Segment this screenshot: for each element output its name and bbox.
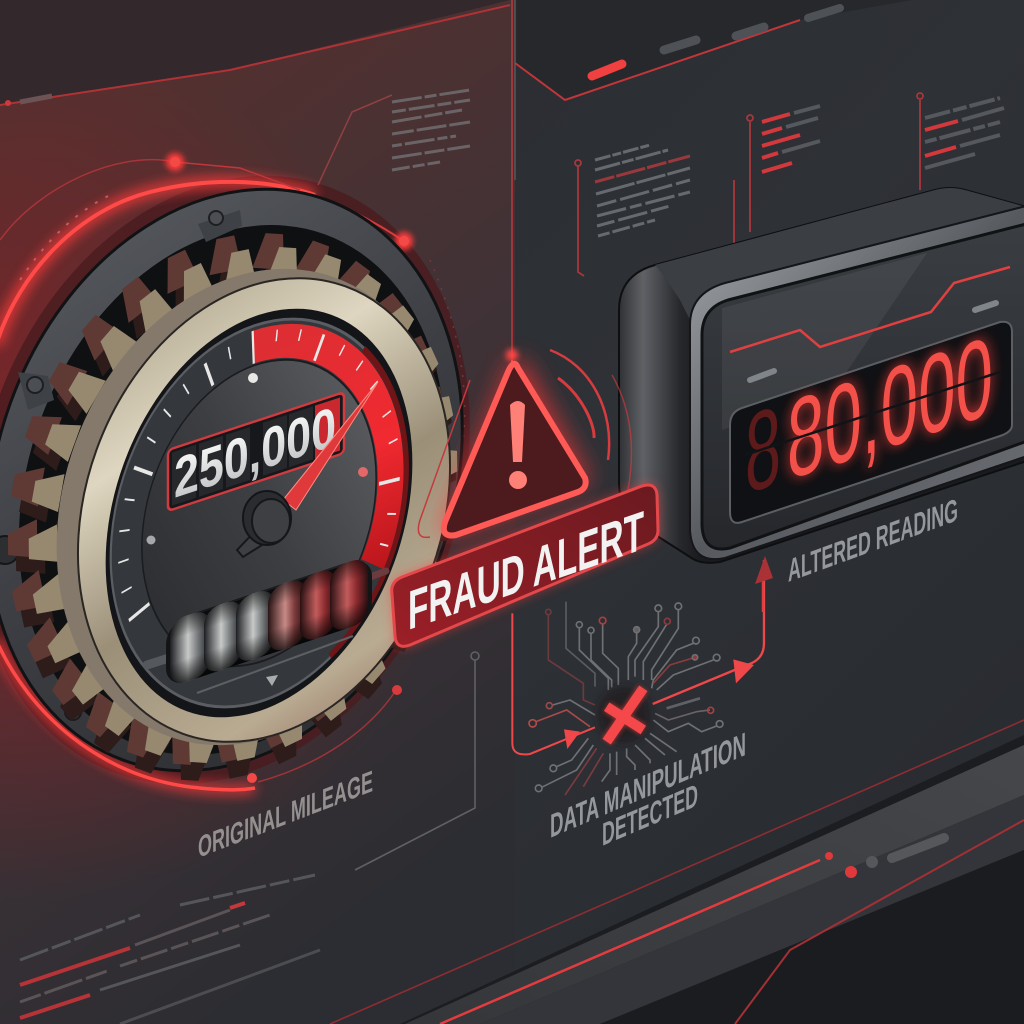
arrow up to device	[755, 556, 773, 612]
thin leader line: below badge	[355, 652, 479, 870]
top header lines and pills	[0, 0, 840, 180]
screen status line	[730, 267, 1010, 352]
input arrow	[512, 613, 595, 754]
badge text: FRAUD ALERT	[408, 499, 644, 642]
rollers mechanism	[147, 554, 386, 693]
bottom diagonal band	[330, 720, 1024, 1024]
gear teeth	[0, 171, 528, 843]
device bezel	[690, 205, 1024, 559]
digital display device	[619, 188, 1024, 563]
data manipulation circuit	[512, 560, 764, 795]
data manipulation label: DETECTED	[602, 777, 698, 854]
alert signal arcs	[550, 350, 631, 490]
digit window	[730, 322, 1012, 523]
circuit traces	[529, 602, 723, 795]
exclamation mark	[510, 401, 525, 462]
decorative status bars: upper right	[762, 98, 1004, 172]
odometer gauge	[0, 122, 541, 843]
band indicators	[825, 838, 944, 878]
mileage counter: 250,000: 250,000	[174, 395, 336, 511]
steel mounting ring	[0, 122, 541, 838]
device top face	[655, 188, 1024, 320]
device screen	[702, 223, 1024, 549]
glowing red arcs around gauge	[0, 95, 552, 855]
vertical alert stem	[506, 349, 518, 400]
needle and hub	[237, 382, 378, 557]
original mileage label: ORIGINAL MILEAGE	[198, 764, 373, 865]
red x mark	[597, 687, 651, 743]
decorative text block: upper centre	[595, 145, 690, 236]
circuit leader lines: upper right	[512, 0, 923, 360]
dial dots	[146, 373, 368, 544]
brass bezel ring	[15, 225, 513, 795]
scale ticks	[84, 289, 449, 695]
device body	[619, 188, 1024, 563]
red zone	[191, 306, 454, 569]
decorative data bars: bottom left	[20, 875, 320, 1024]
fraud alert badge	[392, 485, 658, 646]
warning triangle	[418, 350, 631, 537]
output arrow	[653, 560, 764, 704]
screen pills	[750, 303, 996, 380]
data manipulation label: DATA MANIPULATION	[550, 726, 746, 846]
screen gloss	[722, 253, 927, 430]
altered reading digits: 80,000	[745, 313, 1000, 518]
dial face and scale	[59, 277, 459, 749]
altered reading digits: 80,000: 8	[745, 382, 781, 518]
data manipulation label	[550, 726, 746, 854]
dark red crescent beyond the zone	[261, 349, 455, 664]
decorative text block: upper left	[392, 90, 470, 170]
